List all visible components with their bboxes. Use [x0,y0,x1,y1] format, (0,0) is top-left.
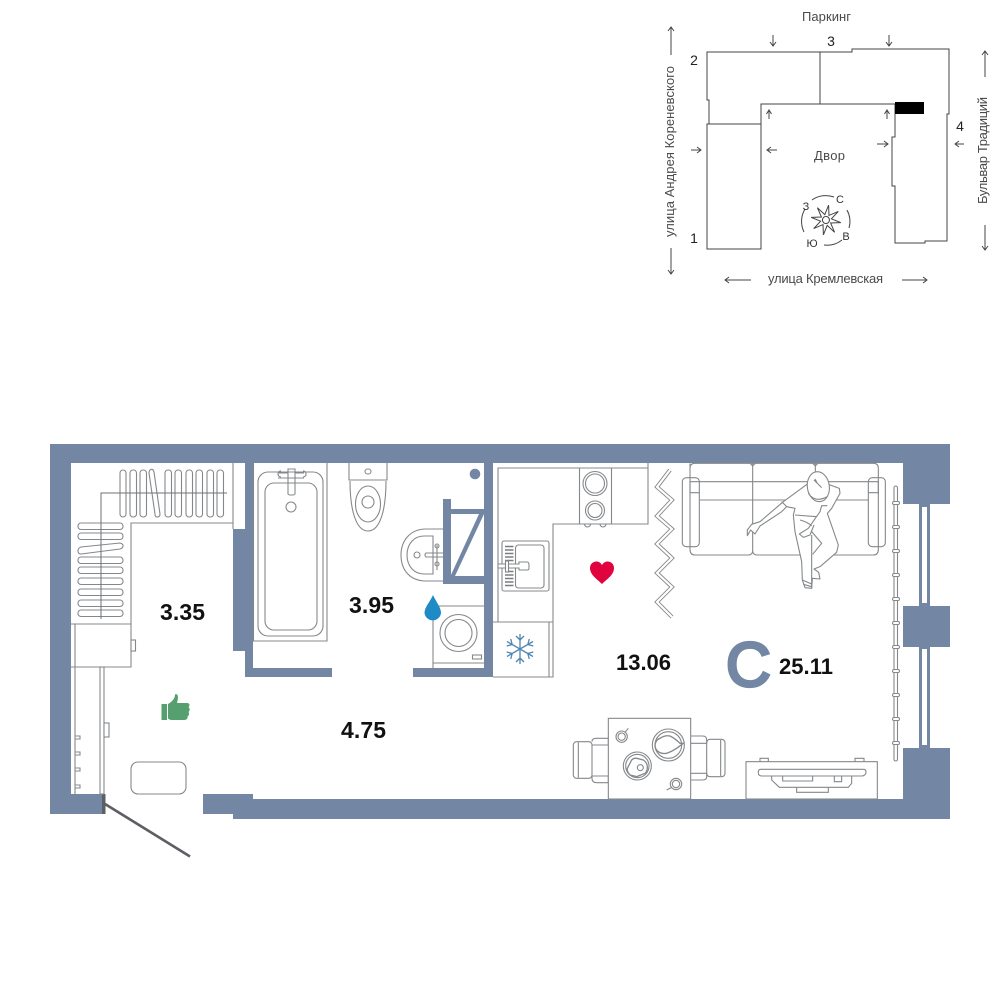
door leaf [105,804,190,856]
cup bottom inner [672,780,680,788]
wardrobe outline [71,463,233,794]
wardrobe handle [131,640,136,651]
plate right [652,729,684,761]
cistern [349,463,387,480]
person [747,470,840,588]
tub frame [254,463,327,641]
windows [919,504,930,748]
sofa [682,463,885,555]
wardrobe [71,463,233,794]
body [433,606,484,668]
drain board [505,546,514,586]
person face [808,479,827,499]
right chair detail [691,736,721,780]
shoe cabinet [75,667,109,794]
left chair detail [578,738,608,783]
plate left inner [626,754,649,778]
door jamb [102,794,106,814]
drum outer [440,614,477,652]
thumb hand [168,694,190,720]
cup top handle [625,728,628,732]
basin inner [407,536,433,574]
area: hallway: 4.75 [341,717,386,743]
rear burner inner [588,504,602,518]
tap [425,545,443,570]
person body [747,483,840,588]
washing machine [433,606,484,668]
folding partition [657,470,672,617]
label: courtyard: Двор [814,148,845,163]
toilet [349,463,387,531]
compass star [811,205,841,235]
sofa body [690,463,878,555]
thumb cuff [162,704,167,720]
person head [805,470,831,503]
floor plan walls [50,444,950,819]
compass letters: З [803,201,810,213]
egg food [627,758,647,777]
partition inner [657,470,672,617]
bowl [350,481,386,531]
cabinet door [100,667,104,794]
cup top [616,731,627,742]
upper window frame [919,504,930,606]
label: Kremlevskaya street: улица Кремлевская [768,271,883,286]
compass letters: Ю [806,238,818,250]
dining table set [573,718,877,799]
section number 2: 2 [690,52,698,68]
sofa cushions [690,463,878,552]
cup bottom handle [667,787,672,790]
tub outer edge [258,472,323,636]
lower window frame [919,647,930,748]
tap [278,469,304,495]
left clothes [78,523,123,616]
kitchen sink [498,541,549,591]
bowl inner [356,486,380,522]
area: wardrobe: 3.35 [160,599,205,625]
compass [802,194,850,250]
apartment type letter: С [726,631,771,700]
left chair [573,742,592,778]
partition outer [657,470,672,617]
area: bathroom: 3.95 [349,592,394,618]
label: parking: Паркинг [802,9,851,24]
hooks [75,736,80,788]
drum inner [445,620,472,646]
lower window glass [922,649,927,745]
area: living room: 13.06 [616,650,671,675]
tap [498,562,529,570]
arrows [668,27,988,283]
right arm [868,478,885,547]
cup bottom [670,778,682,790]
apartment location marker [895,102,924,114]
label: Traditsiy boulevard: Бульвар Традиций [975,97,990,204]
compass letters: С [836,194,844,206]
flush button [365,469,371,474]
basin [516,545,544,588]
tap knobs and drain [278,471,306,512]
section dividers [707,52,820,124]
radiator pipe [894,486,898,761]
section number 4: 4 [956,118,964,134]
person detail lines [782,502,827,588]
left arm [682,478,699,547]
knobs [584,524,606,527]
tv feet [760,758,864,762]
icon: thumbs up [162,694,190,720]
upper window glass [922,507,927,603]
area: total: 25.11 [779,654,833,679]
cup top inner [618,733,625,740]
cooktop [580,468,612,527]
door [102,794,190,856]
tap handle [506,561,508,572]
radiator fins [892,502,900,744]
shower partition [443,499,484,584]
knobs and drain [414,544,439,566]
tub inner edge [265,483,317,630]
section number 3: 3 [827,33,835,49]
compass letters: В [842,231,850,243]
right chair [707,739,725,777]
egg yolk [637,765,643,771]
site map [662,9,990,286]
plate left [623,752,651,780]
sink body [502,541,549,591]
leaf food [655,736,683,753]
label: Koreneveskogo street: улица Андрея Кореневского [662,66,677,237]
tv stand [746,762,877,799]
front burner [583,472,607,496]
cabinet handle [104,723,109,737]
compass rings [802,196,850,245]
front burner inner [586,474,604,493]
bathtub [254,463,327,641]
hanging rail [101,493,227,619]
riser [470,469,480,479]
icon: snowflake [507,634,533,664]
rear burner [586,501,604,520]
icon: water drop [424,595,441,620]
bathroom sink [401,529,443,581]
tv [758,769,866,776]
section number 1: 1 [690,230,698,246]
compass letters [803,194,850,250]
plate right inner [655,732,682,758]
hall bench [131,762,186,794]
upper clothes [120,469,224,517]
bowl drain [362,496,374,508]
building outline [707,49,949,249]
icon: heart [590,561,614,584]
panel [472,655,482,659]
table top [608,718,691,799]
basin outline [401,529,443,581]
kitchen counter [493,463,648,677]
radiator [892,486,900,761]
cooktop frame [580,468,612,524]
tv stand details [772,776,852,792]
